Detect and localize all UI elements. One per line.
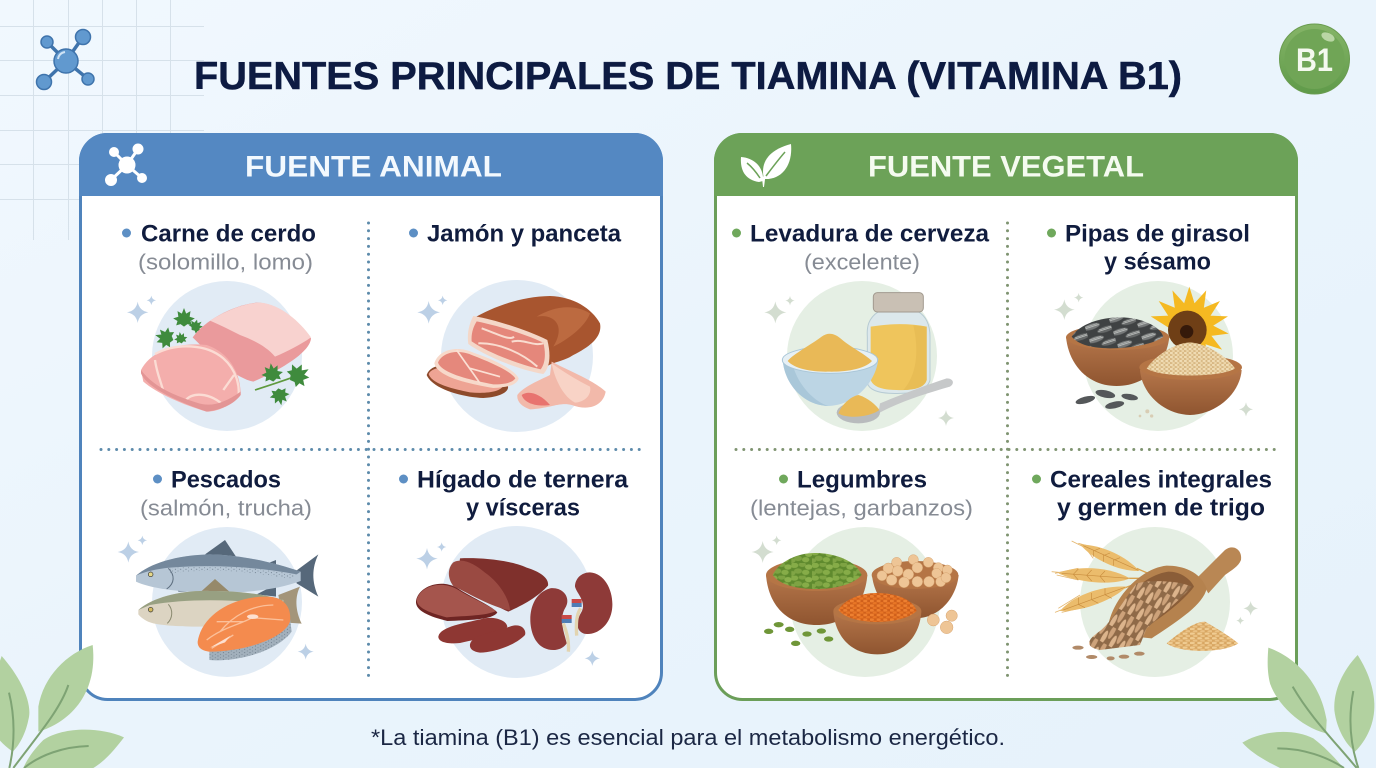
item: legumbres xyxy=(750,466,973,677)
item: levadura de cerveza: (excelente) xyxy=(804,250,920,274)
illustration: seeds and sunflower xyxy=(1054,286,1253,418)
item: legumbres: (lentejas, garbanzos) xyxy=(750,496,973,520)
panel header: vegetal xyxy=(714,133,1298,196)
item: pescados: (salmón, trucha) xyxy=(140,496,312,520)
item: hígado de ternera y vísceras xyxy=(399,466,629,678)
panel: fuente animal xyxy=(79,133,663,700)
item: pipas de girasol y sésamo: Pipas de girasol xyxy=(1065,220,1250,248)
illustration: fish xyxy=(118,536,318,660)
item: pipas de girasol y sésamo xyxy=(1047,220,1253,431)
decoration: leaves bottom right xyxy=(1242,648,1374,768)
item: legumbres: Legumbres xyxy=(797,466,927,494)
illustration: whole grains xyxy=(1052,541,1258,660)
dotted dividers xyxy=(101,223,640,677)
icon: molecule xyxy=(36,30,94,90)
illustration: liver and kidneys xyxy=(416,542,612,666)
item: jamón y panceta: Jamón y panceta xyxy=(427,220,622,248)
decoration: leaves bottom left xyxy=(0,645,124,768)
item: levadura de cerveza: Levadura de cerveza xyxy=(750,220,990,248)
illustration: ham xyxy=(417,296,606,409)
illustration: pork xyxy=(127,296,315,412)
title: FUENTES PRINCIPALES DE TIAMINA (VITAMINA B1) xyxy=(194,55,1182,98)
illustration: legumes xyxy=(752,536,959,654)
item: levadura de cerveza xyxy=(732,220,990,431)
item: carne de cerdo: Carne de cerdo xyxy=(141,220,316,248)
heading: fuente animal: FUENTE ANIMAL xyxy=(245,150,502,184)
panel: fuente vegetal xyxy=(714,133,1298,700)
item: pescados: Pescados xyxy=(171,466,281,494)
item: hígado de ternera y vísceras: Hígado de ternera xyxy=(417,466,629,494)
dotted dividers xyxy=(736,223,1275,677)
item: cereales integrales y germen de trigo xyxy=(1032,466,1272,677)
item: jamón y panceta xyxy=(409,220,622,432)
icon: leaves xyxy=(741,144,791,187)
item: cereales integrales y germen de trigo: Cereales integrales xyxy=(1050,466,1272,494)
background grid xyxy=(0,0,204,240)
panel header: animal xyxy=(79,133,663,196)
icon: white molecule xyxy=(106,144,146,186)
item: carne de cerdo xyxy=(122,220,316,431)
item: pipas de girasol y sésamo: y sésamo xyxy=(1104,248,1211,276)
heading: fuente vegetal: FUENTE VEGETAL xyxy=(868,150,1144,184)
item: hígado de ternera y vísceras: y vísceras xyxy=(466,494,580,522)
badge: B1: B1 xyxy=(1296,42,1333,78)
illustration: yeast xyxy=(764,293,954,426)
item: cereales integrales y germen de trigo: y germen de trigo xyxy=(1057,494,1265,522)
footnote: *La tiamina (B1) es esencial para el metabolismo energético. xyxy=(371,725,1005,750)
item: pescados xyxy=(118,466,318,677)
badge: B1 xyxy=(1280,24,1350,94)
item: carne de cerdo: (solomillo, lomo) xyxy=(138,250,313,274)
